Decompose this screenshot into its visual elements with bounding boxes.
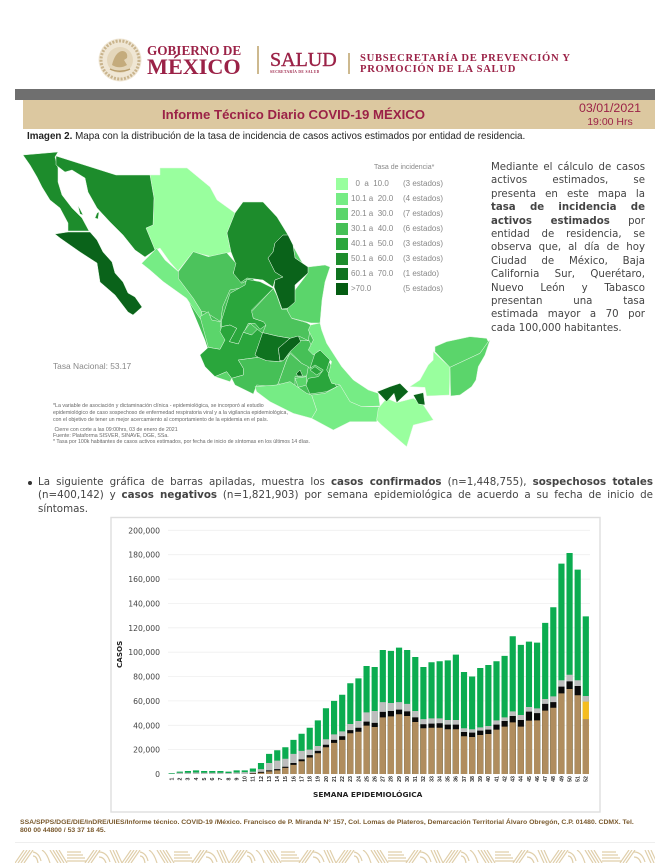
series: pending (yellow) — [583, 702, 589, 774]
map legend: >70.0 — [351, 284, 371, 292]
map legend: (1 estado) — [403, 268, 439, 278]
x axis week labels: 17 — [299, 776, 305, 782]
x axis week labels: 27 — [381, 776, 387, 782]
x axis week labels: 50 — [567, 776, 573, 782]
bullet point text: (n=400,142) y casos negativos (n=1,821,903) por semana epidemiológica de acuerdo a su fecha de inicio de — [38, 489, 653, 501]
y axis tick labels: 80,000 — [133, 672, 160, 682]
map explanatory text: activos estimados, se — [491, 175, 645, 186]
x axis week labels: 13 — [267, 776, 273, 782]
x axis week labels: 7 — [218, 777, 224, 780]
x axis week labels: 12 — [259, 776, 265, 782]
x axis week labels: 14 — [275, 776, 281, 782]
map explanatory text: entidad de residencia, se — [491, 229, 645, 240]
x axis week labels: 15 — [283, 776, 289, 782]
footer address text: 800 00 44800 / 53 37 18 45. — [20, 827, 106, 834]
map footnotes: * Tasa por 100k habitantes de casos activos estimados, por fecha de inicio de síntomas en los últimos 14 días. — [53, 439, 310, 445]
x axis week labels: 19 — [316, 776, 322, 782]
y axis tick labels: 40,000 — [133, 721, 160, 730]
map legend: 10.1 a 20.0 — [351, 194, 393, 202]
x axis week labels: 36 — [454, 776, 460, 782]
x axis week labels: 37 — [462, 776, 468, 782]
y axis tick labels: 0 — [155, 770, 160, 779]
bullet point text: La siguiente gráfica de barras apiladas, muestra los casos confirmados (n=1,448,755), sospechosos totales — [38, 476, 653, 488]
map explanatory text: Ciudad de México, Baja — [491, 256, 645, 267]
y axis title: CASOS — [115, 641, 124, 668]
x axis week labels: 33 — [429, 776, 435, 782]
y axis tick labels: 160,000 — [128, 575, 160, 584]
stacked bar chart panel — [110, 516, 601, 813]
map footnotes: *La variable de asociación y dictaminación clínica - epidemiológica, se incorporó al estudio — [53, 403, 264, 409]
x axis week labels: 35 — [446, 776, 452, 782]
legend title: Tasa de incidencia* — [374, 164, 434, 171]
map legend: (6 estados) — [403, 224, 443, 232]
y axis tick labels: 140,000 — [128, 599, 160, 608]
map legend: (5 estados) — [403, 284, 443, 292]
bullet point text — [28, 476, 653, 515]
text: Gobierno de México: GOBIERNO DE — [147, 43, 241, 58]
map explanatory text: observa que, al día de hoy — [491, 242, 645, 253]
icon: bullet — [28, 481, 32, 485]
x axis week labels: 38 — [470, 776, 476, 782]
map legend: (7 estados) — [403, 208, 443, 218]
map legend: 0 a 10.0 — [355, 178, 389, 188]
footer decorative band — [15, 850, 655, 863]
x axis title: SEMANA EPIDEMIOLÓGICA — [313, 790, 423, 799]
x axis week labels: 46 — [535, 776, 541, 782]
map footnotes: con el objetivo de tener un mejor acercamiento al comportamiento de la epidemia en el país. — [53, 417, 268, 423]
map explanatory text — [491, 161, 645, 334]
x axis week labels: 34 — [438, 776, 444, 782]
date and time: 19:00 Hrs — [587, 116, 633, 128]
date and time: 03/01/2021 — [579, 101, 641, 115]
y axis tick labels: 180,000 — [128, 551, 160, 560]
header: government logos: SECRETARÍA DE SALUD — [270, 70, 320, 74]
x axis week labels: 11 — [251, 776, 257, 782]
map legend: 20.1 a 30.0 — [351, 208, 393, 218]
footer address text — [20, 818, 634, 834]
x axis week labels: 4 — [194, 777, 200, 780]
x axis week labels: 24 — [356, 776, 362, 782]
map legend — [336, 164, 443, 295]
y axis tick labels — [128, 526, 160, 779]
text: Salud: SALUD — [270, 49, 337, 71]
x axis week labels: 16 — [291, 776, 297, 782]
text: Subsecretaría — [360, 52, 571, 75]
header: title band — [23, 100, 655, 129]
x axis week labels: 26 — [372, 776, 378, 782]
group: central states — [200, 279, 337, 394]
x axis week labels: 25 — [364, 776, 370, 782]
footer address text: SSA/SPPS/DGE/DIE/InDRE/UIES/Informe técnico. COVID-19 /México. Francisco de P. Miranda N° 157, Col. Lomas de Plateros, Demarcación Territorial Álvaro Obregón, C.P. 01480. CDMX. Tel. — [20, 819, 634, 826]
x axis week labels: 21 — [332, 776, 338, 782]
x axis week labels: 44 — [519, 776, 525, 782]
group: northwest-central states — [142, 248, 248, 322]
header: gray band — [15, 89, 655, 100]
national rate label: Tasa Nacional: 53.17 — [53, 361, 131, 371]
y axis tick labels: 60,000 — [133, 697, 160, 706]
footer divider — [15, 842, 655, 843]
map legend: 30.1 a 40.0 — [351, 224, 393, 232]
series: confirmed cases (tan) — [250, 689, 589, 774]
x axis week labels: 18 — [308, 776, 314, 782]
series: deaths or other category (black) — [250, 681, 581, 774]
x axis week labels: 43 — [510, 776, 516, 782]
x axis week labels: 49 — [559, 776, 565, 782]
date and time — [579, 101, 641, 128]
map explanatory text: Nuevo León y Tabasco — [491, 283, 645, 294]
map explanatory text: presenta en este mapa la — [491, 189, 645, 200]
title: Informe Técnico Diario COVID-19 MÉXICO — [162, 107, 425, 122]
header: government logos — [98, 38, 571, 82]
x axis week labels: 10 — [243, 776, 249, 782]
x axis week labels: 51 — [576, 776, 582, 782]
map legend: 50.1 a 60.0 — [351, 254, 393, 262]
text: Subsecretaría: PROMOCIÓN DE LA SALUD — [360, 64, 516, 75]
map footnotes: epidemiológico de caso sospechoso de enfermedad respiratoria viral y a la vigilancia epidemiológica, — [53, 410, 288, 416]
x axis week labels — [170, 776, 590, 782]
map footnotes: Fuente: Plataforma SISVER, SINAVE, DGE, SSa. — [53, 433, 169, 439]
map explanatory text: activos estimados por — [491, 216, 645, 227]
group: southern states — [255, 323, 433, 447]
map explanatory text: presentan una tasa — [491, 296, 645, 307]
x axis week labels: 20 — [324, 776, 330, 782]
y axis tick labels: 200,000 — [128, 526, 160, 535]
x axis week labels: 41 — [494, 776, 500, 782]
map legend: (3 estados) — [403, 238, 443, 248]
x axis week labels: 32 — [421, 776, 427, 782]
map legend: 60.1 a 70.0 — [351, 268, 393, 278]
map explanatory text: estimada mayor a 70 por — [491, 309, 645, 320]
y axis tick labels: 100,000 — [128, 648, 160, 657]
map footnotes — [53, 403, 310, 445]
y axis tick labels: 120,000 — [128, 624, 160, 633]
x axis week labels: 8 — [226, 777, 232, 780]
bars: stacked series by week — [169, 553, 589, 774]
x axis week labels: 31 — [413, 776, 419, 782]
x axis week labels: 5 — [202, 777, 208, 780]
map legend: 40.1 a 50.0 — [351, 238, 393, 248]
x axis week labels: 1 — [170, 777, 176, 780]
map footnotes: Cierre con corte a las 09:00hrs, 03 de enero de 2021 — [54, 427, 178, 433]
x axis week labels: 47 — [543, 776, 549, 782]
x axis week labels: 28 — [389, 776, 395, 782]
x axis week labels: 52 — [584, 776, 590, 782]
bullet point text: síntomas. — [38, 503, 88, 515]
map explanatory text: tasa de incidencia de — [491, 202, 645, 213]
x axis week labels: 29 — [397, 776, 403, 782]
x axis week labels: 23 — [348, 776, 354, 782]
map caption: Imagen 2. Mapa con la distribución de la tasa de incidencia de casos activos estimados por entidad de residencia. — [27, 131, 525, 142]
x axis week labels: 6 — [210, 777, 216, 780]
text: Subsecretaría: SUBSECRETARÍA DE PREVENCIÓN Y — [360, 53, 571, 64]
map explanatory text: cada 100,000 habitantes. — [491, 323, 622, 334]
x axis week labels: 9 — [234, 777, 240, 780]
group: Yucatan peninsula — [410, 337, 490, 396]
x axis week labels: 2 — [178, 777, 184, 780]
header: government logos: MÉXICO — [147, 54, 241, 79]
map legend: (3 estados) — [403, 254, 443, 262]
map explanatory text: Mediante el cálculo de casos — [491, 162, 645, 173]
x axis week labels: 42 — [502, 776, 508, 782]
series: negative cases (green) — [169, 553, 589, 774]
x axis week labels: 39 — [478, 776, 484, 782]
x axis week labels: 22 — [340, 776, 346, 782]
x axis week labels: 30 — [405, 776, 411, 782]
x axis week labels: 45 — [527, 776, 533, 782]
x axis week labels: 3 — [186, 777, 192, 780]
map legend: (3 estados) — [403, 178, 443, 188]
map legend: (4 estados) — [403, 194, 443, 202]
x axis week labels: 40 — [486, 776, 492, 782]
series: suspected cases (gray) — [169, 675, 589, 774]
x axis week labels: 48 — [551, 776, 557, 782]
map explanatory text: California Sur, Querétaro, — [491, 269, 645, 280]
y axis tick labels: 20,000 — [133, 746, 160, 755]
icon: national seal — [98, 38, 142, 82]
choropleth map of Mexico — [23, 152, 490, 447]
